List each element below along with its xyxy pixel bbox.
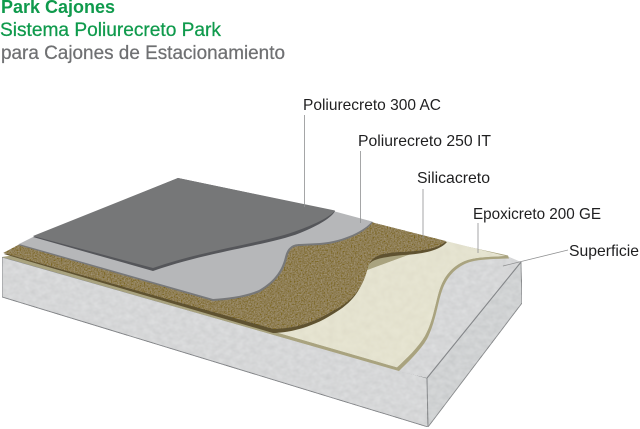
leader: Poliurecreto 300 AC <box>304 115 306 207</box>
leader: Silicacreto <box>422 189 424 238</box>
concrete slab: left front face <box>2 257 428 427</box>
layered floor diagram <box>2 178 522 427</box>
layer surface: Poliurecreto 300 AC <box>33 178 335 268</box>
label: Silicacreto: Silicacreto <box>417 170 490 187</box>
layer: Silicacreto <box>3 180 446 329</box>
layer surface: Poliurecreto 250 IT <box>19 180 372 299</box>
concrete slab: right side face <box>427 262 522 427</box>
leader: Superficie <box>503 250 568 266</box>
label: Superficie: Superficie <box>569 243 639 260</box>
leader: Poliurecreto 250 IT <box>360 151 362 223</box>
title block <box>0 0 285 64</box>
epoxy layer lip <box>2 210 509 371</box>
concrete slab: top surface (Superficie) <box>397 255 521 378</box>
layer edge: Poliurecreto 300 AC <box>33 178 335 271</box>
subtitle: para Cajones de Estacionamiento: para Cajones de Estacionamiento <box>1 43 285 64</box>
label: Epoxicreto 200 GE: Epoxicreto 200 GE <box>473 206 601 223</box>
slab top edge line <box>427 262 521 378</box>
layer edge: Poliurecreto 250 IT <box>18 180 373 301</box>
label: Poliurecreto 300 AC: Poliurecreto 300 AC <box>303 97 441 114</box>
layer: Epoxicreto 200 GE <box>240 241 506 368</box>
layer labels <box>303 97 639 260</box>
leader lines <box>304 115 568 266</box>
subtitle: Sistema Poliurecreto Park: Sistema Poliurecreto Park <box>0 20 221 41</box>
leader: Epoxicreto 200 GE <box>477 223 479 253</box>
layer edge: dark silica underside <box>4 210 447 333</box>
label: Poliurecreto 250 IT: Poliurecreto 250 IT <box>358 133 491 150</box>
